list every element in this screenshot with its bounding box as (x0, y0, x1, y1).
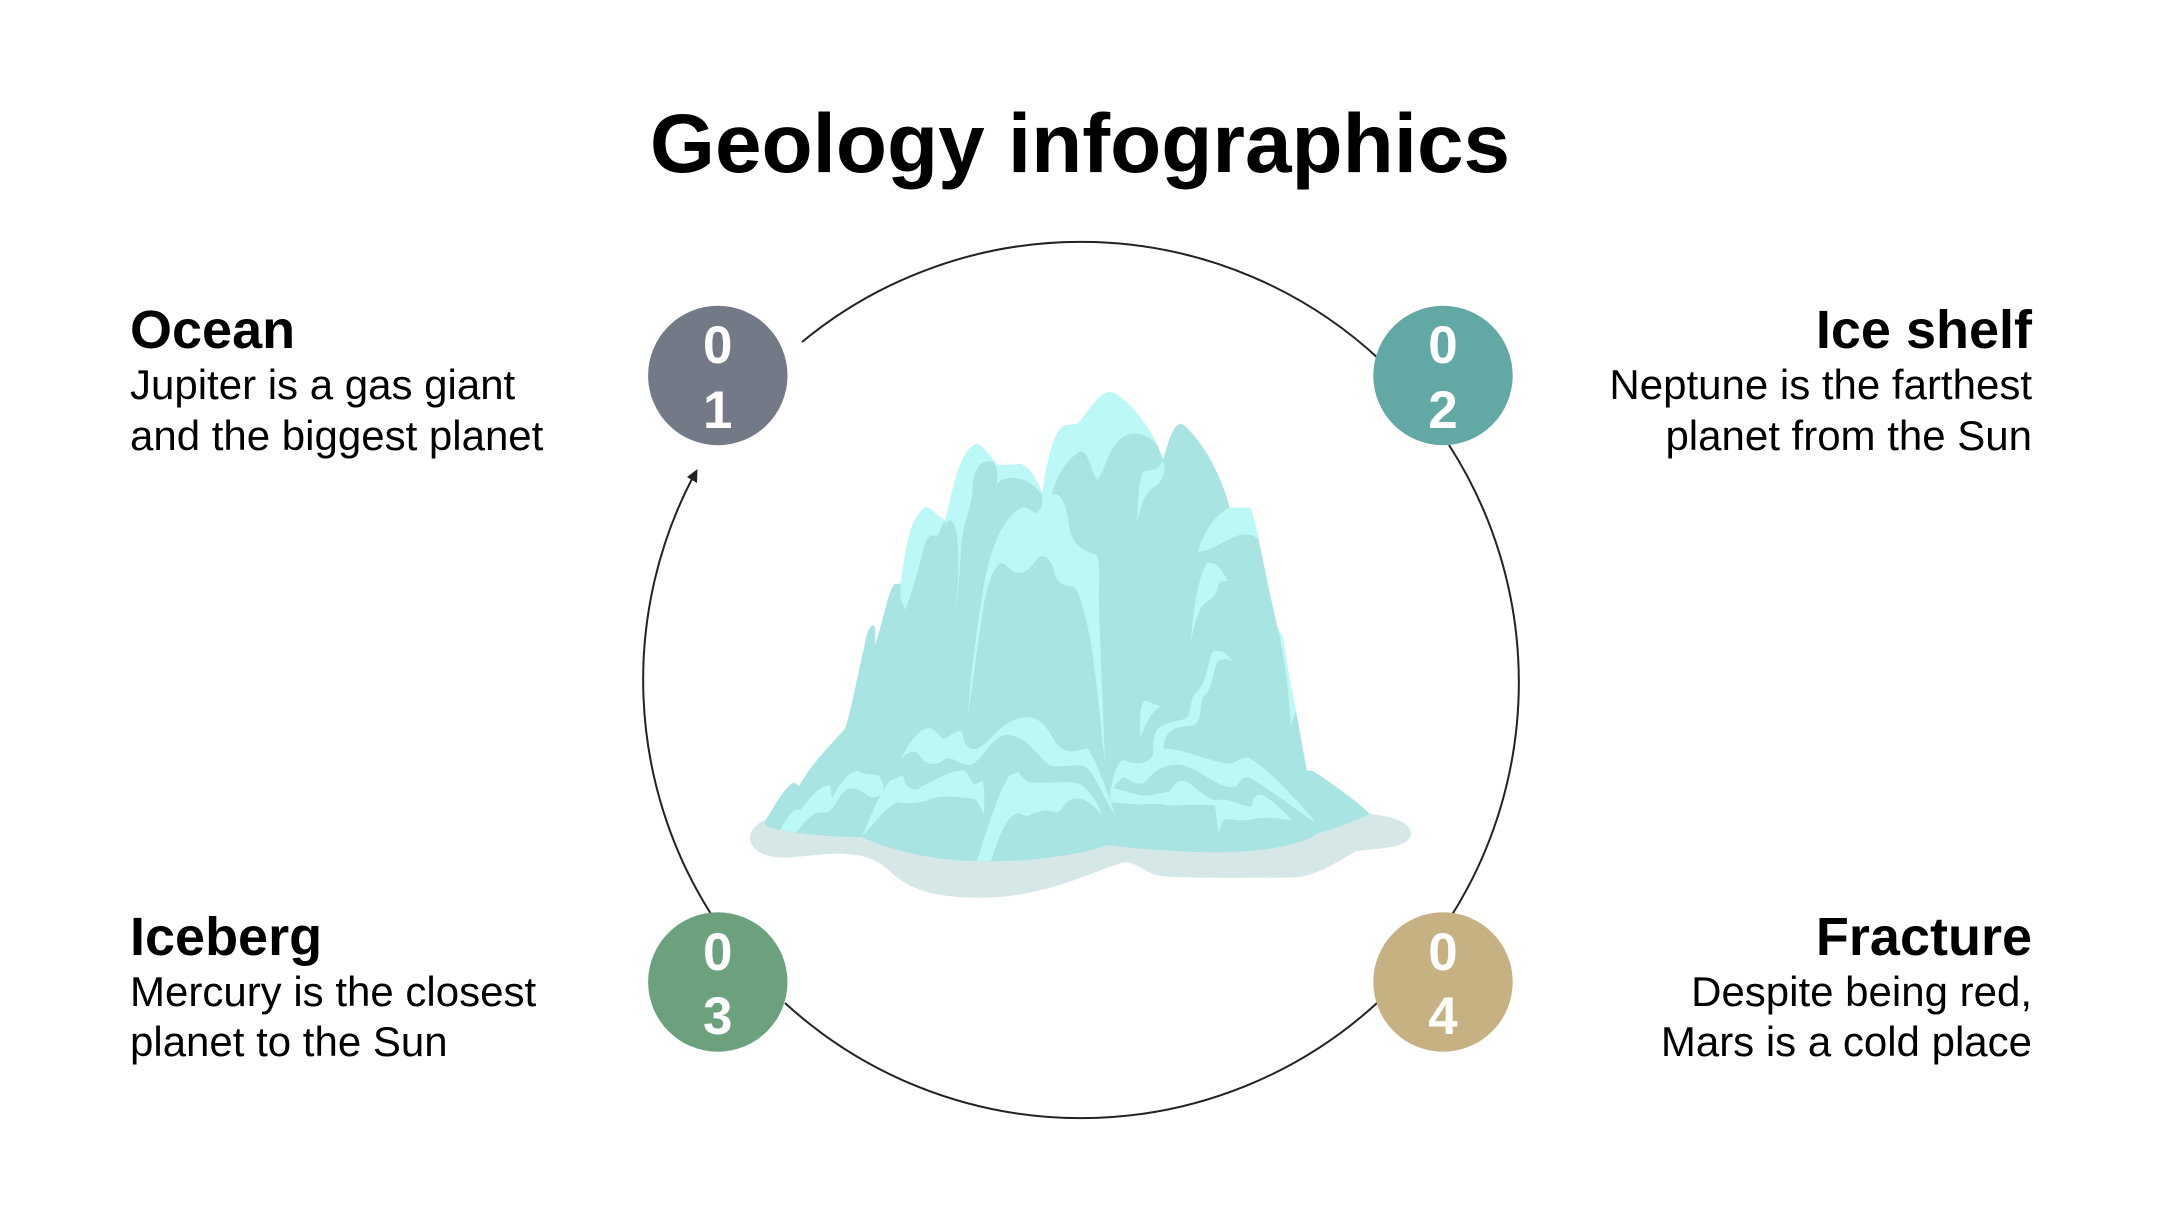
text block: Ice shelf: Ice shelf (1816, 300, 2033, 360)
iceberg highlights (781, 392, 1317, 861)
text block: Ocean: Jupiter is a gas giant (130, 361, 516, 408)
badge 01: 0 (703, 316, 733, 375)
text block: Fracture: Despite being red, (1691, 968, 2032, 1015)
text block: Ocean (130, 300, 544, 459)
badge 03: 3 (703, 987, 733, 1046)
badge 04: 0 (1428, 923, 1458, 982)
badge 01 (648, 306, 788, 445)
iceberg shadow (750, 799, 1411, 898)
iceberg body (764, 392, 1370, 861)
badge 02: 2 (1428, 381, 1458, 440)
text block: Ice shelf (1609, 300, 2033, 459)
text block: Ice shelf: planet from the Sun (1665, 412, 2032, 459)
text block: Fracture (1661, 907, 2032, 1065)
text block: Iceberg: Iceberg (130, 907, 322, 967)
badge 04 (1373, 912, 1513, 1052)
text block: Fracture: Fracture (1816, 907, 2032, 967)
badge 01: 1 (703, 381, 733, 440)
cycle ring with arrow (643, 242, 1519, 1118)
text block: Iceberg: Mercury is the closest (130, 968, 536, 1015)
text block: Ocean: Ocean (130, 300, 295, 360)
badge 03: 0 (703, 923, 733, 982)
badge 02 (1373, 306, 1513, 445)
text block: Fracture: Mars is a cold place (1661, 1018, 2032, 1065)
badge 04: 4 (1428, 987, 1458, 1046)
text block: Ice shelf: Neptune is the farthest (1609, 361, 2032, 408)
text block: Iceberg (130, 907, 536, 1065)
text block: Iceberg: planet to the Sun (130, 1018, 448, 1065)
badge 02: 0 (1428, 316, 1458, 375)
badge 03 (648, 912, 788, 1052)
title: Geology infographics (650, 96, 1510, 190)
text block: Ocean: and the biggest planet (130, 412, 544, 459)
iceberg illustration (750, 392, 1411, 898)
